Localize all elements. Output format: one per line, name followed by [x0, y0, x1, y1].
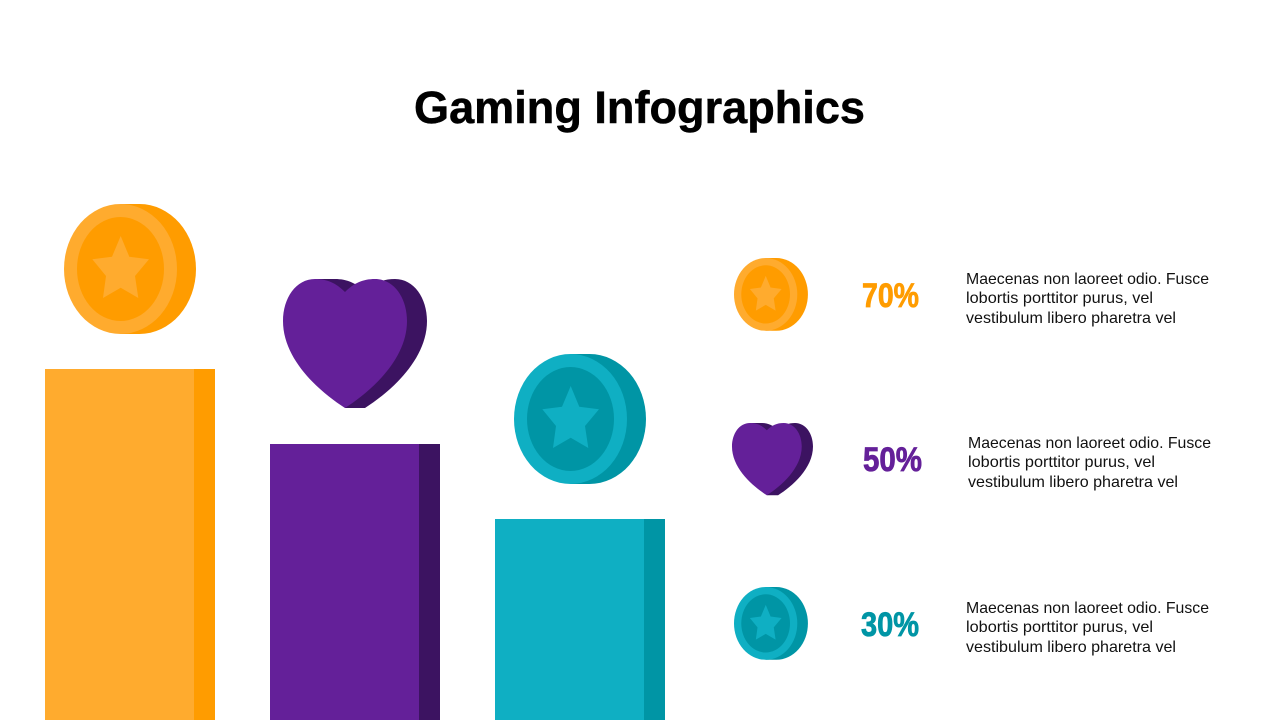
icon: large purple heart [283, 279, 427, 408]
legend row: orange 70% [734, 258, 1209, 331]
icon: small orange star coin [734, 258, 808, 331]
text block: orange description [966, 271, 1209, 327]
text block: purple description: lobortis porttitor purus, vel [968, 454, 1155, 471]
icon: small purple heart [732, 423, 813, 495]
text block: teal description [966, 600, 1209, 656]
text block: teal description: Maecenas non laoreet odio. Fusce [966, 600, 1209, 617]
text block: orange description: vestibulum libero pharetra vel [966, 310, 1176, 327]
percentage: 50%: 50% [863, 441, 922, 479]
text block: orange description: lobortis porttitor purus, vel [966, 290, 1153, 307]
icon: large orange star coin [64, 204, 196, 334]
legend row: purple 50% [732, 423, 1211, 495]
title: Gaming Infographics [414, 82, 865, 133]
percentage: 70%: 70% [862, 277, 919, 315]
legend row: teal 30% [734, 587, 1209, 660]
bar: teal 30% [495, 519, 665, 720]
text block: orange description: Maecenas non laoreet odio. Fusce [966, 271, 1209, 288]
percentage: 30%: 30% [861, 606, 919, 644]
icon: large teal star coin [514, 354, 646, 484]
bar: orange 70% [45, 369, 215, 720]
text block: purple description: Maecenas non laoreet odio. Fusce [968, 435, 1211, 452]
bar: purple 50% [270, 444, 440, 720]
text block: purple description [968, 435, 1211, 491]
icon: small teal star coin [734, 587, 808, 660]
text block: purple description: vestibulum libero pharetra vel [968, 474, 1178, 491]
bar chart [45, 369, 665, 720]
text block: teal description: lobortis porttitor purus, vel [966, 619, 1153, 636]
text block: teal description: vestibulum libero pharetra vel [966, 639, 1176, 656]
